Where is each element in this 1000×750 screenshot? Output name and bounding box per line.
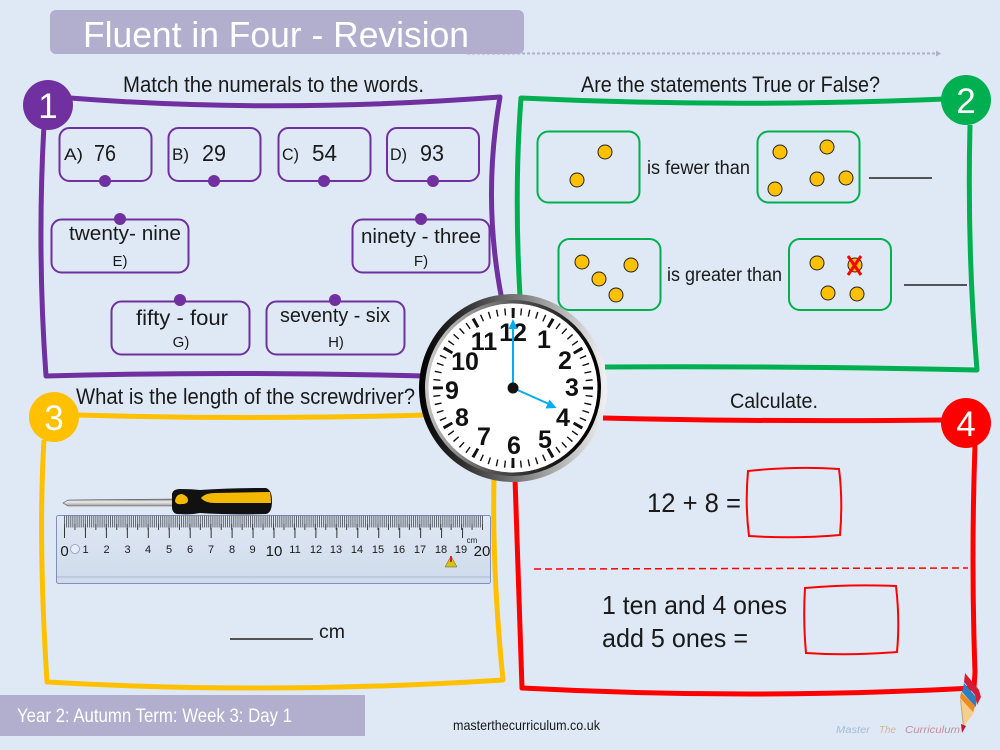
ruler: 20 — [474, 543, 490, 560]
clock numerals: 9 — [445, 377, 459, 405]
clock numerals: 7 — [477, 423, 491, 451]
ruler: 18 — [435, 544, 447, 556]
panel 3 number badge — [29, 392, 79, 442]
ruler: 11 — [289, 544, 301, 556]
ruler: 12 — [310, 544, 322, 556]
ruler: 3 — [124, 544, 131, 556]
numeral card D: D) — [390, 145, 407, 164]
ruler: 9 — [249, 544, 256, 556]
panel 4: calculate — [515, 390, 991, 694]
numeral card B: 29 — [202, 140, 226, 166]
ruler: cm — [467, 536, 478, 545]
panel 3 heading: What is the length of the screwdriver? — [76, 384, 415, 409]
numeral card D: 93 — [420, 140, 444, 166]
word card F: ninety - three — [361, 226, 481, 248]
numeral card A — [60, 128, 152, 187]
ruler: 0 — [60, 543, 69, 560]
panel 4 number badge: 4 — [956, 405, 976, 444]
clock rim — [419, 294, 607, 482]
sum 2: 1 ten and 4 ones — [602, 590, 787, 620]
clock numerals: 11 — [471, 328, 497, 356]
ruler logo mark — [445, 556, 457, 567]
numeral card D — [387, 128, 479, 187]
word card H: seventy - six — [280, 305, 390, 327]
clock numerals: 2 — [558, 347, 572, 375]
ruler: 13 — [330, 544, 342, 556]
footer term label: Year 2: Autumn Term: Week 3: Day 1 — [17, 706, 292, 727]
ruler: 7 — [208, 544, 214, 556]
clock numerals: 8 — [455, 404, 469, 432]
logo: wordmark: Master — [836, 725, 871, 736]
logo: wordmark: Curriculum — [905, 725, 960, 736]
ruler — [56, 516, 490, 584]
statement 2: is greater than — [667, 265, 782, 286]
clock numerals: 4 — [556, 404, 570, 432]
word card F — [352, 213, 490, 272]
word card E — [52, 213, 188, 272]
ruler: 8 — [229, 544, 235, 556]
statement 2 — [558, 239, 967, 310]
numeral card B — [168, 128, 260, 187]
word card G — [112, 294, 250, 354]
clock numerals: 6 — [507, 432, 521, 460]
word card E: E) — [112, 253, 128, 270]
statement 1: is fewer than — [647, 158, 750, 179]
panel 4 number badge — [941, 398, 991, 448]
panel 1: match numerals to words — [23, 72, 504, 376]
logo: wordmark: The — [879, 725, 896, 736]
clock numerals: 5 — [538, 426, 552, 454]
panel 3 frame — [42, 415, 503, 688]
clock numerals: 12 — [499, 319, 527, 347]
word card E: twenty- nine — [69, 223, 181, 245]
panel 1 number badge: 1 — [38, 87, 58, 126]
ruler: 15 — [372, 544, 384, 556]
numeral card C — [278, 128, 370, 187]
answer line with cm: cm — [319, 622, 345, 643]
panel 4 heading: Calculate. — [730, 390, 818, 413]
ruler: 10 — [266, 543, 282, 560]
panel 1 frame — [41, 97, 504, 376]
clock numerals: 3 — [565, 374, 579, 402]
numeral card C: 54 — [312, 140, 337, 166]
numeral card A: 76 — [94, 140, 116, 166]
clock hands — [508, 319, 556, 408]
panel 3: screwdriver length — [29, 384, 503, 688]
screwdriver — [63, 488, 272, 514]
answer line with cm — [230, 622, 345, 643]
panel 1 heading: Match the numerals to the words. — [123, 72, 424, 97]
ruler: 1 — [82, 544, 89, 556]
word card H: H) — [328, 334, 344, 351]
logo: pencil — [960, 673, 981, 733]
logo: wordmark — [836, 725, 960, 736]
footer term label — [0, 695, 365, 736]
word card G: G) — [173, 334, 189, 351]
ruler: 2 — [103, 544, 110, 556]
clock numerals — [445, 319, 579, 460]
dotted arrow under title — [467, 50, 941, 56]
ruler: 14 — [351, 544, 363, 556]
clock numerals: 1 — [537, 326, 551, 354]
panel 2: true or false — [517, 72, 991, 370]
panel 2 number badge — [941, 75, 991, 125]
ruler: 6 — [187, 544, 193, 556]
word card G: fifty - four — [136, 307, 228, 330]
word card H — [266, 294, 404, 354]
ruler: 4 — [145, 544, 151, 556]
statement 1 — [538, 132, 932, 202]
clock ticks — [436, 312, 590, 464]
panel 2 heading: Are the statements True or False? — [581, 72, 880, 97]
clock numerals: 10 — [451, 348, 479, 376]
panel 2 number badge: 2 — [956, 82, 976, 121]
clock — [419, 294, 607, 482]
ruler: 17 — [414, 544, 426, 556]
sum 1: 12 + 8 = — [647, 488, 741, 518]
numeral card C: C) — [282, 145, 299, 164]
numeral card B: B) — [172, 145, 189, 164]
footer website: masterthecurriculum.co.uk — [453, 717, 601, 733]
ruler: 5 — [166, 544, 172, 556]
numeral card A: A) — [64, 145, 83, 164]
sum 2 — [602, 585, 898, 654]
panel 2 frame — [517, 98, 977, 370]
panel 1 number badge — [23, 80, 73, 130]
sum 2: add 5 ones = — [602, 623, 748, 653]
ruler: 16 — [393, 544, 405, 556]
panel 3 number badge: 3 — [44, 399, 64, 438]
word card F: F) — [414, 253, 428, 270]
title banner: Fluent in Four - Revision — [83, 14, 469, 55]
sum 1 — [647, 468, 841, 537]
ruler: 19 — [455, 544, 467, 556]
panel 4 frame — [515, 418, 975, 694]
